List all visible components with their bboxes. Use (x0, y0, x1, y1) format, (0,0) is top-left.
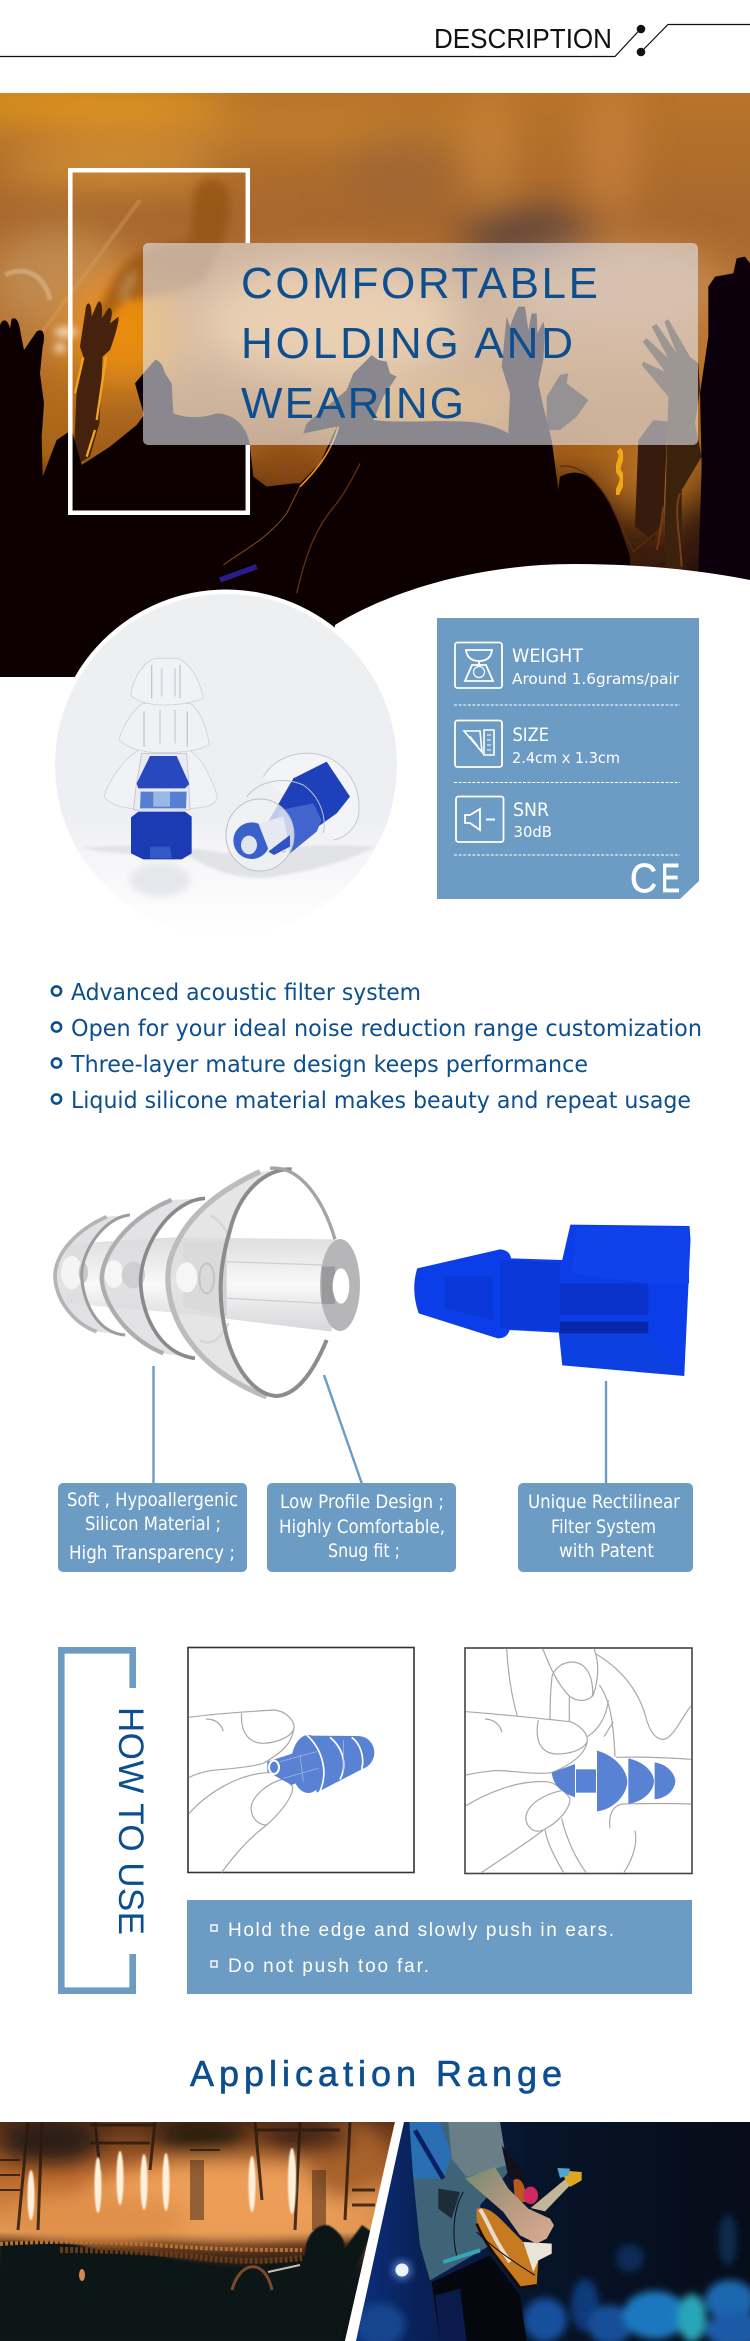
icon: speaker (456, 796, 504, 842)
header title: DESCRIPTION (434, 23, 612, 54)
stage trusses (0, 2122, 375, 2230)
callout: silicone: Silicon Material ; (85, 1513, 221, 1535)
snr text (513, 799, 552, 841)
guitar body (477, 2168, 582, 2288)
step 1 illustration (188, 1648, 414, 1872)
callout: silicone: Soft , Hypoallergenic (67, 1489, 238, 1511)
standing earplug (104, 658, 217, 859)
lying earplug (226, 753, 359, 871)
header: description (0, 23, 750, 56)
far right arm (698, 256, 750, 580)
stage light flares (54, 268, 140, 353)
spotlight (393, 2261, 411, 2279)
callout: design: Snug fit ; (328, 1540, 400, 1562)
size text: SIZE (512, 724, 549, 746)
white frame (70, 170, 248, 513)
diagram: blue filter (414, 1225, 690, 1376)
step 2 illustration (465, 1648, 692, 1874)
blue earplug section (552, 1751, 675, 1811)
icon: weighing scale (455, 642, 502, 688)
weight text: WEIGHT (512, 645, 583, 667)
bullet text: Advanced acoustic filter system (71, 980, 421, 1006)
flange rings (55, 1168, 335, 1397)
weight text (512, 645, 680, 688)
bullet text: Liquid silicone material makes beauty and repeat usage (71, 1088, 691, 1114)
white curved cutout (0, 564, 750, 720)
callout: design: Highly Comfortable, (279, 1516, 445, 1538)
photo: guitarist on stage (355, 2122, 750, 2341)
crowd silhouettes (0, 256, 750, 658)
title: WEARING (241, 379, 464, 428)
cable (454, 2192, 535, 2275)
hand outline (189, 1710, 294, 1872)
main crowd mass (0, 306, 630, 658)
size text (512, 724, 620, 767)
raised arm silhouette (73, 301, 119, 467)
snr text: SNR (513, 799, 549, 821)
title: COMFORTABLE (241, 259, 598, 308)
hero photo: concert crowd (0, 80, 750, 717)
tube end (320, 1239, 360, 1331)
bell walls (55, 1215, 130, 1335)
blurred blue audience (355, 2214, 750, 2341)
dashed divider (454, 705, 680, 855)
instructions bar (187, 1900, 692, 1994)
ce mark (630, 855, 680, 901)
floor shadow (80, 845, 375, 878)
translucent title panel (143, 243, 698, 445)
inner circles (176, 1262, 197, 1292)
size text: 2.4cm x 1.3cm (512, 749, 620, 767)
hand outline (466, 1649, 691, 1872)
tube (67, 1237, 335, 1332)
callout: silicone (58, 1483, 247, 1572)
heading: application range: Application Range (190, 2053, 562, 2094)
instructions text (228, 1920, 614, 1977)
diagram: exploded earplug silicone tip (55, 1168, 360, 1397)
feature bullet list (52, 980, 702, 1114)
callout: design: Low Profile Design ; (280, 1491, 444, 1513)
guitarist arm (465, 2167, 554, 2244)
performer silhouette (98, 176, 232, 322)
snr text: 30dB (514, 823, 552, 841)
callout: filter: with Patent (559, 1540, 654, 1562)
bullet text (70, 980, 702, 1114)
right foreground arms (635, 420, 668, 540)
crowd (0, 2224, 370, 2270)
guitarist shirt (409, 2122, 508, 2280)
divider stripe (345, 2122, 404, 2341)
blue earplug (267, 1735, 374, 1793)
ce mark: E (661, 855, 680, 901)
how to use label: HOW TO USE (111, 1707, 150, 1935)
flame highlight (617, 450, 622, 495)
product circle with earplugs (52, 590, 400, 938)
bullet text: Three-layer mature design keeps performance (70, 1052, 588, 1078)
instructions text: Do not push too far. (228, 1956, 429, 1977)
photo: festival stage with flames (0, 2117, 410, 2341)
header node icon (637, 25, 645, 56)
ce mark: C (630, 855, 657, 901)
crowd lit row (0, 2242, 302, 2261)
callout lines (154, 1366, 606, 1484)
bullet icons (52, 986, 61, 1104)
small hand (547, 373, 588, 430)
guitarist trousers (432, 2255, 527, 2341)
arm rim light (220, 427, 682, 593)
icon: ruler and set square (455, 720, 502, 767)
callout: design (267, 1483, 456, 1572)
how to use bracket (61, 1650, 150, 1991)
weight text: Around 1.6grams/pair (512, 670, 680, 688)
callout: filter: Unique Rectilinear (528, 1491, 680, 1513)
spotlight core (396, 2264, 408, 2276)
callout: filter: Filter System (551, 1516, 656, 1538)
callout: silicone: High Transparency ; (69, 1542, 235, 1564)
callout: filter (518, 1483, 693, 1572)
instructions text: Hold the edge and slowly push in ears. (228, 1920, 614, 1941)
bullet text: Open for your ideal noise reduction range customization (71, 1016, 702, 1042)
header rule (0, 24, 750, 56)
spec panel (437, 618, 699, 901)
flames (28, 2148, 296, 2220)
guitar strap (502, 2145, 527, 2187)
title (241, 259, 598, 428)
title: HOLDING AND (241, 319, 573, 368)
square bullets (211, 1925, 217, 1967)
